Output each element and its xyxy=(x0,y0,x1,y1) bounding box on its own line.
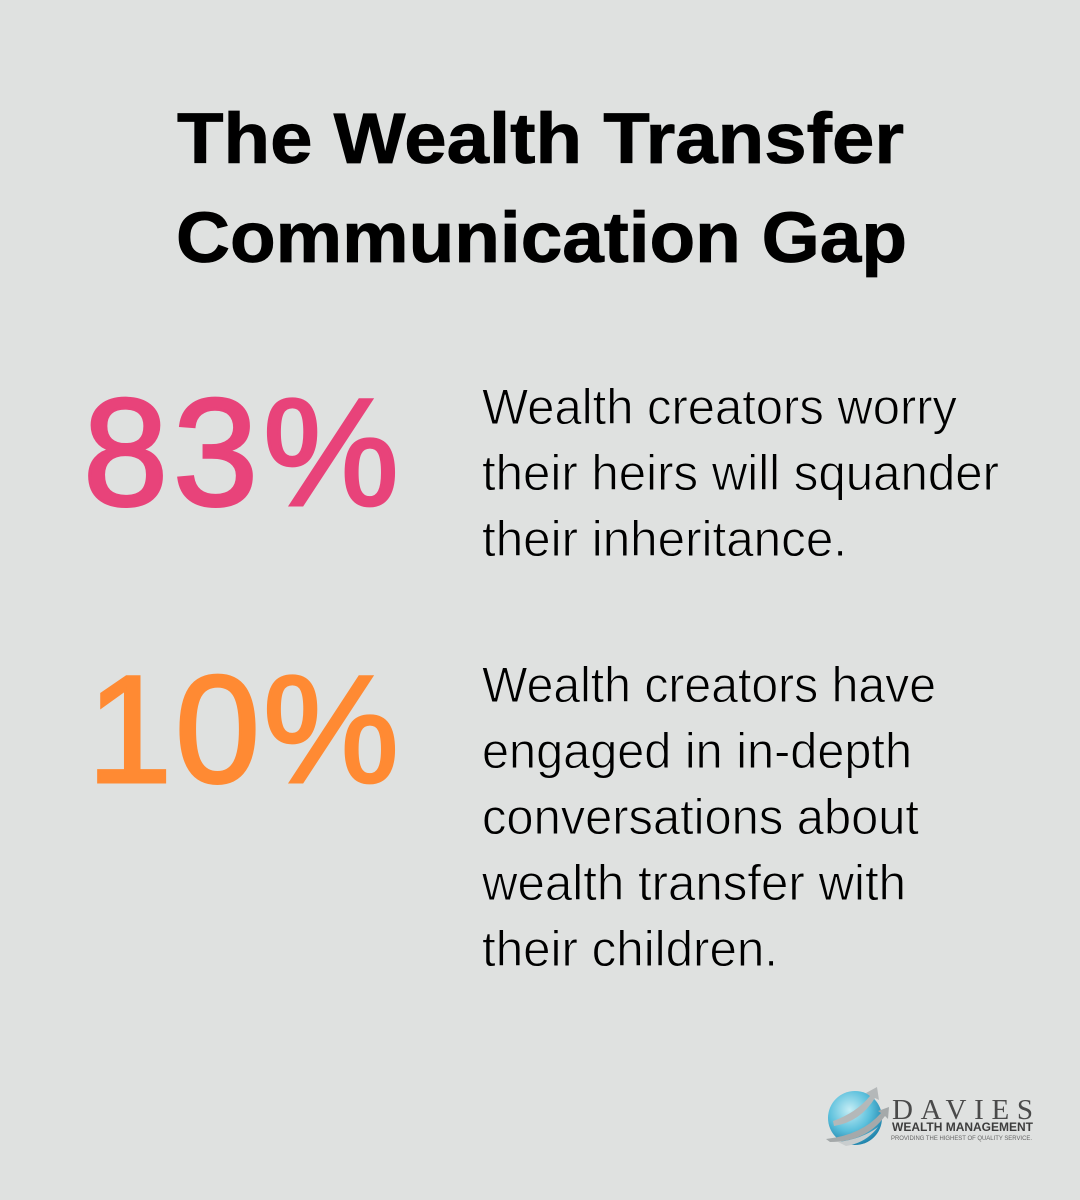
logo wordmark: DAVIES xyxy=(892,1094,1033,1126)
logo subtitle: WEALTH MANAGEMENT xyxy=(892,1120,1034,1134)
text block: 83% description: their inheritance. xyxy=(482,511,847,567)
logo: Davies Wealth Management xyxy=(826,1087,1034,1146)
text block: 83% description: their heirs will squander xyxy=(482,445,999,501)
icon: globe with arrows xyxy=(826,1087,889,1146)
text block: 10% description: their children. xyxy=(482,921,778,977)
stat: 10%: 10% xyxy=(87,644,399,815)
logo tagline: PROVIDING THE HIGHEST OF QUALITY SERVICE. xyxy=(891,1135,1032,1142)
text block: 10% description xyxy=(481,657,936,977)
text block: 10% description: wealth transfer with xyxy=(481,855,906,911)
text block: 10% description: conversations about xyxy=(482,789,919,845)
text block: 83% description xyxy=(482,379,999,567)
stat: 83%: 83% xyxy=(83,367,399,538)
text block: 10% description: Wealth creators have xyxy=(482,657,936,713)
title: The Wealth Transfer xyxy=(177,100,904,179)
title xyxy=(176,100,907,278)
title: Communication Gap xyxy=(176,199,907,278)
text block: 83% description: Wealth creators worry xyxy=(482,379,957,435)
text block: 10% description: engaged in in-depth xyxy=(482,723,912,779)
